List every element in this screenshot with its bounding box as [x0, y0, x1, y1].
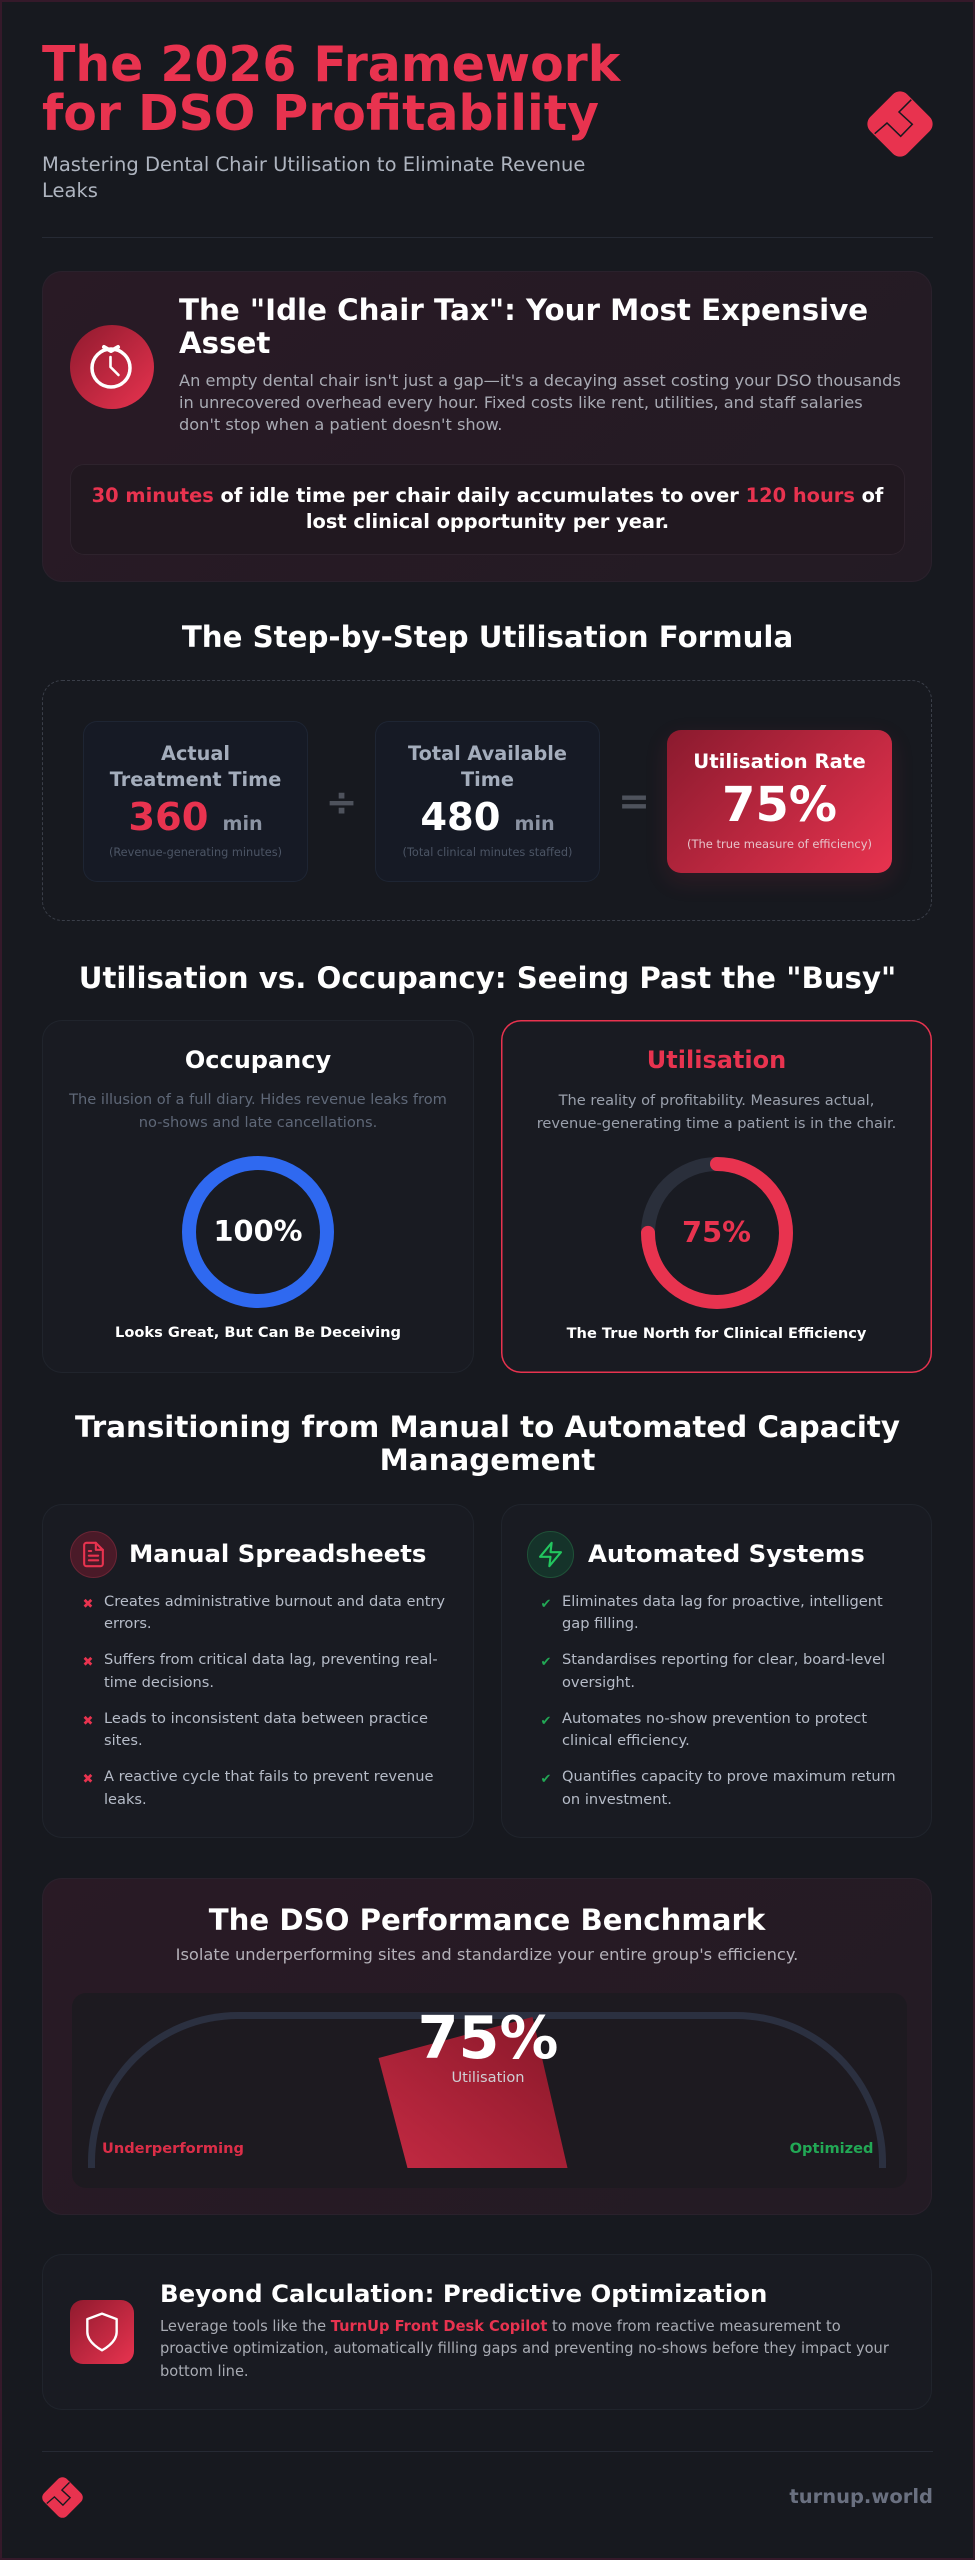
gauge value: 75% — [418, 2003, 558, 2072]
gauge needle — [378, 2017, 568, 2168]
label: Treatment Time — [110, 768, 281, 791]
list item 2 — [540, 1651, 885, 1691]
icon: footer logo — [42, 2477, 83, 2518]
heading: Manual Spreadsheets — [129, 1539, 426, 1568]
subtitle: Leaks — [42, 179, 98, 202]
list item 3 — [82, 1710, 428, 1749]
panel: performance benchmark — [42, 1878, 932, 2215]
heading: utilisation vs occupancy: Utilisation vs. Occupancy: Seeing Past the "Busy" — [79, 961, 896, 995]
heading: Asset — [179, 326, 270, 360]
panel: automated systems — [501, 1504, 932, 1838]
label — [408, 742, 567, 791]
description — [179, 371, 901, 434]
list item 1 — [540, 1593, 883, 1632]
value: 360 min — [128, 795, 263, 840]
list item 2: Suffers from critical data lag, preventing real- — [104, 1651, 438, 1668]
list item 4: ✔ — [540, 1772, 551, 1787]
value: 75% — [722, 777, 837, 833]
list item 2: ✖ — [82, 1655, 93, 1670]
list item 1: gap filling. — [562, 1615, 639, 1632]
heading: The DSO Performance Benchmark — [209, 1903, 765, 1937]
description — [537, 1092, 896, 1132]
subtitle — [42, 153, 585, 202]
label: optimized: Optimized — [790, 2140, 874, 2157]
formula box: total available time — [375, 721, 600, 882]
heading: Occupancy — [185, 1046, 331, 1074]
title — [42, 36, 622, 142]
list item 2: oversight. — [562, 1674, 635, 1691]
description: The reality of profitability. Measures actual, — [559, 1092, 874, 1108]
heading: Utilisation — [647, 1046, 786, 1074]
list item 4: Quantifies capacity to prove maximum return — [562, 1768, 896, 1785]
list item 2: ✔ — [540, 1655, 551, 1670]
footer url: turnup.world — [789, 2485, 933, 2508]
panel: utilisation — [501, 1020, 932, 1373]
description: bottom line. — [160, 2363, 249, 2380]
note: (The true measure of efficiency) — [687, 837, 872, 851]
label: Actual — [161, 742, 230, 765]
list item 3: ✔ — [540, 1714, 551, 1728]
ring value: 100% — [214, 1214, 302, 1248]
heading: Beyond Calculation: Predictive Optimization — [160, 2279, 767, 2308]
label — [110, 742, 281, 791]
heading: manual to automated: Transitioning from Manual to Automated Capacity — [75, 1410, 900, 1444]
callout text: 30 minutes of idle time per chair daily accumulates to over 120 hours of — [92, 484, 883, 507]
heading: Automated Systems — [588, 1539, 865, 1568]
callout text — [92, 484, 884, 533]
gauge label: Utilisation — [451, 2069, 525, 2086]
label: underperforming: Underperforming — [102, 2140, 244, 2157]
list item 3: sites. — [104, 1732, 143, 1749]
list item 4 — [82, 1768, 434, 1808]
callout text: lost clinical opportunity per year. — [306, 510, 669, 533]
list item 4: ✖ — [82, 1772, 93, 1787]
title: The 2026 Framework — [42, 36, 620, 93]
operator: divide: ÷ — [326, 780, 357, 824]
list item 3: clinical efficiency. — [562, 1732, 690, 1749]
note: (Revenue-generating minutes) — [109, 846, 282, 859]
formula box: actual treatment time — [83, 721, 308, 882]
description: proactive optimization, automatically filling gaps and preventing no-shows before they impact your — [160, 2340, 889, 2357]
chart: gauge — [72, 1993, 906, 2188]
label: Utilisation Rate — [693, 750, 866, 773]
list item 2 — [82, 1651, 438, 1691]
list item 1: Eliminates data lag for proactive, intelligent — [562, 1593, 883, 1610]
caption: Looks Great, But Can Be Deceiving — [115, 1324, 401, 1341]
operator: equals: = — [618, 779, 650, 823]
heading: formula: The Step-by-Step Utilisation Formula — [182, 620, 793, 654]
list item 3: ✖ — [82, 1714, 93, 1728]
heading: manual to automated — [75, 1410, 900, 1477]
panel: occupancy — [42, 1020, 474, 1373]
panel: formula — [42, 680, 932, 921]
subtitle: Mastering Dental Chair Utilisation to Eliminate Revenue — [42, 153, 585, 176]
value: 480 min — [420, 795, 555, 840]
description: The illusion of a full diary. Hides revenue leaks from — [69, 1090, 447, 1108]
list item 4: leaks. — [104, 1791, 147, 1808]
list item 2: time decisions. — [104, 1674, 214, 1691]
heading: manual to automated: Management — [380, 1443, 595, 1477]
gauge arc — [88, 2012, 886, 2168]
list item 3: Leads to inconsistent data between practice — [104, 1710, 428, 1726]
list item 4: A reactive cycle that fails to prevent revenue — [104, 1768, 434, 1785]
list item 3 — [540, 1710, 867, 1749]
panel: idle chair tax — [42, 271, 932, 582]
list item 4 — [540, 1768, 896, 1808]
description: no-shows and late cancellations. — [139, 1114, 377, 1130]
callout: idle time stat — [70, 464, 905, 555]
panel: predictive optimization — [42, 2254, 932, 2410]
list item 1 — [82, 1593, 445, 1632]
label: Total Available — [408, 742, 567, 765]
caption: The True North for Clinical Efficiency — [567, 1324, 866, 1342]
description — [69, 1090, 447, 1130]
description: don't stop when a patient doesn't show. — [179, 415, 502, 434]
list item 1: ✖ — [82, 1597, 93, 1612]
chart: 75% ring — [641, 1157, 793, 1309]
header — [42, 36, 933, 202]
result box: utilisation rate — [667, 730, 892, 873]
footer — [42, 2477, 933, 2518]
title: for DSO Profitability — [42, 85, 599, 142]
list item 2: Standardises reporting for clear, board-level — [562, 1651, 885, 1668]
ring value: 75% — [682, 1214, 751, 1248]
description: An empty dental chair isn't just a gap—it's a decaying asset costing your DSO thousands — [179, 371, 901, 390]
heading: The "Idle Chair Tax": Your Most Expensive — [179, 293, 868, 327]
description: Leverage tools like the TurnUp Front Desk Copilot to move from reactive measurement to — [160, 2318, 841, 2335]
icon: lightning bolt — [527, 1531, 574, 1578]
list item 1: ✔ — [540, 1597, 551, 1612]
subtitle: Isolate underperforming sites and standardize your entire group's efficiency. — [176, 1945, 798, 1964]
icon: logo — [867, 91, 933, 157]
heading — [179, 293, 868, 360]
note: (Total clinical minutes staffed) — [403, 846, 572, 859]
description: in unrecovered overhead every hour. Fixed costs like rent, utilities, and staff salaries — [179, 393, 863, 412]
description: revenue-generating time a patient is in the chair. — [537, 1114, 896, 1132]
chart: 100% ring — [182, 1156, 334, 1308]
label: Time — [461, 768, 514, 791]
list item 4: on investment. — [562, 1791, 672, 1808]
panel: manual spreadsheets — [42, 1504, 474, 1838]
icon: document — [70, 1531, 117, 1578]
description — [160, 2318, 889, 2380]
icon: shield — [70, 2300, 134, 2364]
list item 1: Creates administrative burnout and data entry — [104, 1593, 445, 1610]
icon: clock — [70, 325, 154, 409]
list item 1: errors. — [104, 1615, 152, 1632]
list item 3: Automates no-show prevention to protect — [562, 1710, 867, 1726]
